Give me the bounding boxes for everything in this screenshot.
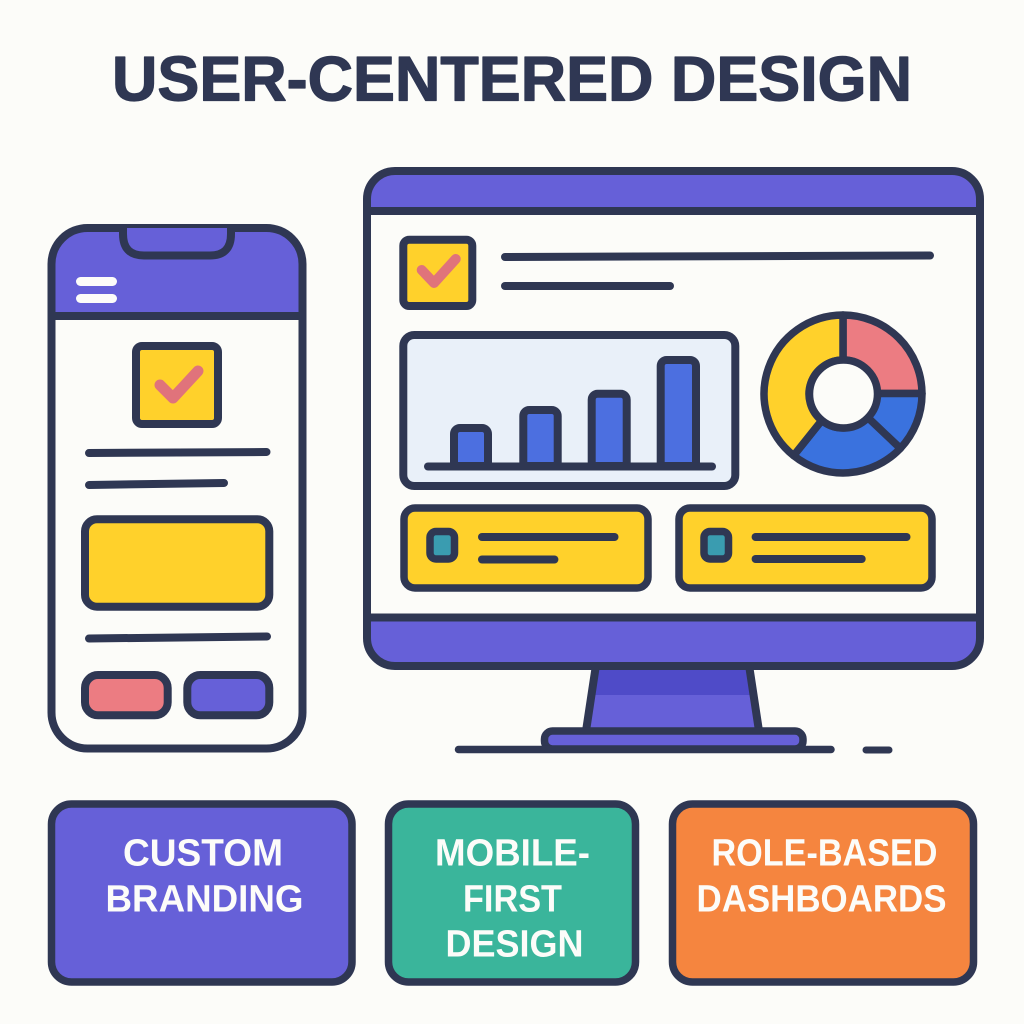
bar chart — [403, 335, 735, 486]
donut chart — [764, 315, 922, 473]
monitor stand — [458, 665, 889, 750]
panel: mobile-first design: DESIGN — [446, 924, 584, 966]
phone purple button — [187, 675, 269, 715]
icon: phone notch — [123, 228, 231, 256]
phone yellow card — [85, 519, 269, 607]
monitor text lines — [505, 256, 930, 286]
panel: role-based dashboards: DASHBOARDS — [696, 878, 946, 920]
panel: custom branding: BRANDING — [106, 878, 304, 920]
panel: custom branding: CUSTOM — [123, 832, 283, 874]
panel: role-based dashboards — [672, 804, 974, 982]
panel: role-based dashboards: ROLE-BASED — [712, 832, 938, 874]
phone red button — [85, 675, 168, 715]
panel: custom branding — [52, 804, 352, 982]
panel: monitor — [367, 171, 980, 750]
monitor yellow card left — [404, 508, 648, 588]
title: USER-CENTERED DESIGN — [112, 44, 912, 114]
panel: mobile-first design — [388, 804, 636, 982]
icon: hamburger menu — [80, 282, 112, 298]
panel: mobile-first design: FIRST — [463, 878, 562, 920]
panel: mobile-first design: MOBILE- — [435, 832, 590, 874]
icon: monitor checkbox — [403, 240, 472, 306]
icon: phone checkbox — [136, 346, 218, 424]
phone text lines — [89, 452, 267, 638]
monitor yellow card right — [679, 508, 932, 588]
panel: phone — [52, 228, 302, 748]
